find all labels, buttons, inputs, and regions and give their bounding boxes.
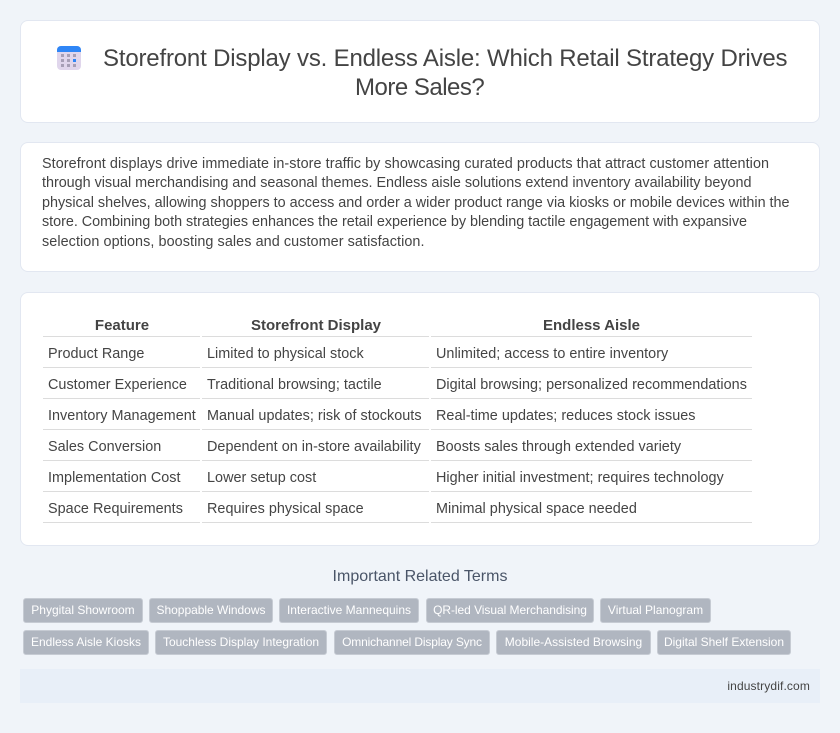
- tag row 1: QR-led Visual Merchandising: [433, 603, 587, 617]
- tag row 1: Phygital Showroom: [31, 603, 135, 617]
- tag row 2: Mobile-Assisted Browsing: [505, 635, 642, 649]
- panel: header: [20, 20, 820, 123]
- table header: Feature: [95, 317, 149, 334]
- heading: important related terms: Important Related Terms: [333, 568, 507, 585]
- table row: sales conversion: Dependent on in-store availability: [207, 439, 421, 455]
- tag row 2: Digital Shelf Extension: [664, 635, 784, 649]
- title: [103, 45, 787, 101]
- table row: inventory management: Manual updates; risk of stockouts: [207, 408, 422, 424]
- text block: introduction: selection options, boosting sales and customer satisfaction.: [42, 234, 425, 250]
- table row: space requirements: Requires physical space: [207, 501, 364, 517]
- table row: inventory management: Real-time updates; reduces stock issues: [436, 408, 696, 424]
- tag row 2: Omnichannel Display Sync: [342, 635, 482, 649]
- table header: Storefront Display: [251, 317, 381, 334]
- table row: inventory management: Inventory Management: [48, 408, 196, 424]
- icon: calendar grid: [57, 46, 81, 70]
- text block: introduction: physical shelves, allowing shoppers to access and order a wider product range via kiosks or mobile devices within the: [42, 195, 790, 211]
- table row: customer experience: Customer Experience: [48, 377, 187, 393]
- tag row 2: Touchless Display Integration: [163, 635, 319, 649]
- title: More Sales?: [355, 74, 484, 101]
- text block: introduction: through visual merchandising and seasonal themes. Endless aisle solutions extend inventory availability beyond: [42, 175, 751, 191]
- footer credit: industrydif.com: [727, 679, 810, 693]
- table row: product range: [48, 346, 668, 362]
- panel: introduction: [20, 142, 820, 272]
- table row: implementation cost: [48, 470, 724, 486]
- table row: space requirements: Space Requirements: [48, 501, 183, 517]
- table row: customer experience: [48, 377, 747, 393]
- panel: comparison table: [20, 292, 820, 546]
- tag row 2: Endless Aisle Kiosks: [31, 635, 141, 649]
- text block: introduction: [42, 156, 790, 250]
- table row: sales conversion: [48, 439, 681, 455]
- table row: space requirements: Minimal physical space needed: [436, 501, 637, 517]
- table row: product range: Limited to physical stock: [207, 346, 364, 362]
- table row: sales conversion: Boosts sales through extended variety: [436, 439, 681, 455]
- tag row 2: [23, 630, 791, 655]
- footer bar: [20, 669, 820, 703]
- table row: implementation cost: Higher initial investment; requires technology: [436, 470, 724, 486]
- table row: product range: Product Range: [48, 346, 144, 362]
- text block: introduction: Storefront displays drive immediate in-store traffic by showcasing curated products that attract customer attention: [42, 156, 769, 172]
- table header: Endless Aisle: [543, 317, 640, 334]
- table header: [95, 317, 640, 334]
- title: Storefront Display vs. Endless Aisle: Which Retail Strategy Drives: [103, 45, 787, 72]
- tag row 1: Shoppable Windows: [157, 603, 265, 617]
- tag row 1: Interactive Mannequins: [287, 603, 411, 617]
- table row: implementation cost: Lower setup cost: [207, 470, 316, 486]
- tag row 1: Virtual Planogram: [608, 603, 703, 617]
- table row: product range: Unlimited; access to entire inventory: [436, 346, 668, 362]
- text block: introduction: store. Combining both strategies enhances the retail experience by blending tactile engagement with expansive: [42, 214, 747, 230]
- table row: inventory management: [48, 408, 696, 424]
- table row: customer experience: Traditional browsing; tactile: [207, 377, 382, 393]
- table row: implementation cost: Implementation Cost: [48, 470, 181, 486]
- table row: sales conversion: Sales Conversion: [48, 439, 161, 455]
- table row: space requirements: [48, 501, 637, 517]
- tag row 1: [23, 598, 711, 623]
- table row: customer experience: Digital browsing; personalized recommendations: [436, 377, 747, 393]
